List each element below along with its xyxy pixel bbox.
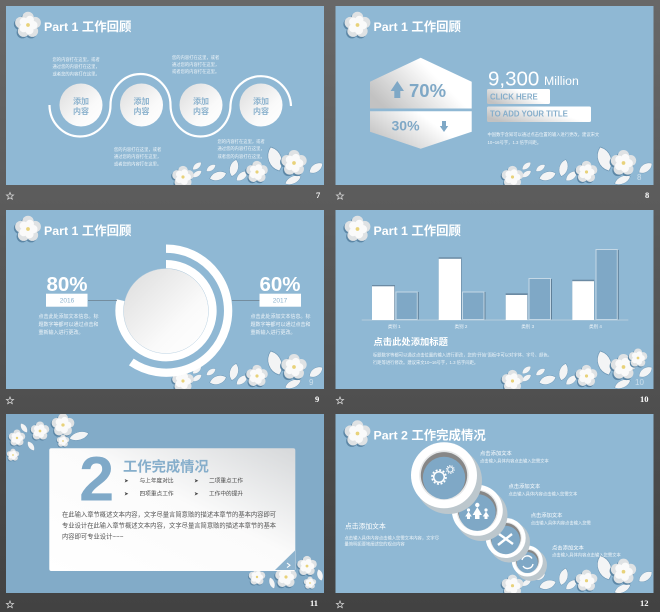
footer: slide 7: 7 <box>316 190 321 200</box>
big number <box>489 72 578 88</box>
step label 4 <box>552 544 621 558</box>
circle 2: 添加 <box>134 96 150 106</box>
text block 2: 通过您的内容打在这里， <box>172 61 219 68</box>
text block 2 <box>172 54 220 74</box>
circle 3 <box>180 84 222 126</box>
connector right <box>232 300 260 301</box>
text block 2: 您的内容打在这里，或者 <box>172 54 220 61</box>
extra flower <box>628 348 647 368</box>
right description: 点击此处添加文本信息。标 <box>250 313 311 320</box>
text block 3 <box>114 146 162 166</box>
left label <box>344 522 440 548</box>
footer: slide 11: 11 <box>310 598 318 608</box>
text block 1: 或者您的内容打在这里。 <box>52 70 100 78</box>
big number: 9,300 <box>488 68 539 90</box>
circle 1 <box>60 84 102 126</box>
icon: tools <box>498 534 513 545</box>
flower logo <box>343 420 370 447</box>
ring chart <box>119 249 228 373</box>
button: add title <box>487 106 591 122</box>
80% stat: 80% <box>46 273 88 296</box>
hexagon top: 70% <box>370 58 472 108</box>
chart description: 标题数字等都可以通过点击位置的输入进行更改，您的“开始”面板中可以对字体、字号、颜色、 <box>373 352 552 358</box>
step label 4: 点击添加文本 <box>552 544 584 552</box>
footer: slide 12 <box>336 598 648 608</box>
page number: 9 <box>309 378 314 387</box>
text block 3: 通过您的内容打在这里， <box>114 153 161 160</box>
flower logo <box>343 12 370 38</box>
button: click here <box>487 89 550 104</box>
bullet list: ➤ <box>124 478 129 484</box>
big number: Million <box>544 74 579 88</box>
step circle 4 <box>512 546 547 581</box>
chart description <box>373 352 552 366</box>
bullet list: 四项重点工作 <box>140 489 174 497</box>
circle 1: 添加 <box>73 96 89 106</box>
slide 7: wave timeline <box>6 6 325 188</box>
step label 3 <box>531 511 592 526</box>
right description <box>250 313 311 336</box>
card <box>49 448 295 571</box>
category labels: 类别 2 <box>455 323 468 330</box>
step circle 3 <box>486 518 530 562</box>
slide 9: ring chart <box>6 210 325 392</box>
icon: refresh <box>522 556 533 568</box>
wave line <box>50 74 291 136</box>
left description <box>38 313 99 336</box>
step label 1: 点击输入具体内容点击输入您需文本 <box>480 458 549 464</box>
right description: 题数字等都可以通过点击和 <box>250 321 311 328</box>
bullet list: ➤ <box>194 478 199 484</box>
category labels <box>388 324 602 329</box>
60% stat: 60% <box>259 273 301 296</box>
step label 4: 点击输入具体内容点击输入您需文本 <box>552 552 621 558</box>
circle 4: 内容 <box>253 106 269 116</box>
left label: 点击输入具体内容点击输入您需文本内容，文字尽 <box>344 534 440 542</box>
slide 8 heading: Part 1 工作回顾 <box>374 19 462 34</box>
left label: 点击添加文本 <box>345 522 386 530</box>
category labels: 类别 4 <box>589 323 602 330</box>
text block 3: 或者您的内容打在这里。 <box>114 160 161 168</box>
circle 1: 内容 <box>73 106 89 116</box>
hexagon top: 70%: 70% <box>409 80 446 101</box>
80% stat: 2016 <box>60 298 75 304</box>
slide 10 heading: Part 1 工作回顾 <box>374 223 462 238</box>
description text: 中国数字含知可以通过点击位置的输入进行更改，建议宋文 <box>488 131 600 138</box>
connector left <box>88 300 117 301</box>
page number: 8 <box>637 173 642 182</box>
description text: 10~16号字，1.3 倍字间距。 <box>488 139 541 146</box>
description text <box>488 132 599 145</box>
section number: 2 <box>79 444 114 514</box>
circle 3: 内容 <box>193 106 209 116</box>
circle 2: 内容 <box>134 106 150 116</box>
flower logo <box>14 12 41 38</box>
bottom-right flowers <box>248 556 324 590</box>
bullet list: ➤ <box>124 491 129 497</box>
footer: slide 9: 9 <box>315 394 319 404</box>
slide 9 heading: Part 1 工作回顾 <box>44 223 132 238</box>
left description: 重新输入进行更改。 <box>38 329 84 336</box>
80% stat <box>46 277 88 307</box>
flower logo <box>14 216 41 242</box>
body text: 专业设计在此输入章节概述文本内容，文字尽量言简意赅的描述本章节的基本 <box>62 520 277 530</box>
text block 1 <box>52 56 100 76</box>
step label 2: 点击输入具体内容点击输入您需文本 <box>508 490 578 498</box>
step label 1: 点击添加文本 <box>480 449 512 457</box>
footer: slide 7 <box>6 190 321 200</box>
slide 12: stepped circles <box>336 414 654 597</box>
bullet list: 与上年度对比 <box>140 476 174 484</box>
hexagon bottom: 30%: 30% <box>392 118 420 134</box>
icon: people <box>465 503 489 519</box>
text block 2: 或者您的内容打在这里。 <box>172 68 219 75</box>
footer: slide 8 <box>336 190 649 200</box>
text block 1: 通过您的内容打在这里， <box>52 63 100 70</box>
circle 4: 添加 <box>253 96 269 106</box>
button: add title: TO ADD YOUR TITLE <box>490 110 568 118</box>
footer: slide 12: 12 <box>640 598 648 608</box>
chart description: 行距等进行修改。建议宋文10~16号字，1.3 倍字间距。 <box>373 359 478 366</box>
corner fold <box>275 550 295 570</box>
text block 4: 通过您的内容打在这里， <box>218 145 265 152</box>
footer: slide 11 <box>6 598 318 608</box>
top-left flowers <box>6 413 90 461</box>
category labels: 类别 1 <box>388 323 401 330</box>
step label 3: 点击添加文本 <box>531 511 563 519</box>
slide 7 heading: Part 1 工作回顾 <box>44 19 132 34</box>
slide 8: hexagon stats <box>336 6 654 188</box>
body text <box>62 510 277 540</box>
section heading: 工作完成情况 <box>123 458 209 476</box>
step label 2 <box>508 482 578 498</box>
button: click here: CLICK HERE <box>490 92 538 102</box>
step circle 1 <box>411 442 482 514</box>
chevron <box>287 563 290 568</box>
text block 1: 您的内容打在这里，或者 <box>52 56 100 63</box>
footer: slide 8: 8 <box>645 190 649 200</box>
chart heading: 点击此处添加标题 <box>374 336 449 347</box>
category labels: 类别 3 <box>521 323 535 330</box>
footer: slide 10: 10 <box>640 394 648 404</box>
circle 4 <box>240 84 282 126</box>
60% stat: 2017 <box>273 298 288 304</box>
60% stat <box>260 277 301 307</box>
left description: 点击此处添加文本信息。标 <box>38 313 99 320</box>
text block 4 <box>218 138 265 160</box>
body text: 在此输入章节概述文本内容，文字尽量言简意赅的描述本章节的基本内容即可 <box>62 510 276 518</box>
body text: 内容即可专业设计~~~ <box>62 532 124 540</box>
right description: 重新输入进行更改。 <box>250 329 296 336</box>
slide 11: section card <box>6 413 324 593</box>
bullet list <box>124 476 243 497</box>
step circle 2 <box>452 485 508 541</box>
slide 12 heading: Part 2 工作完成情况 <box>374 428 486 442</box>
step label 2: 点击添加文本 <box>508 482 541 490</box>
icon: gears <box>432 466 454 484</box>
bullet list: 二项重点工作 <box>209 476 243 484</box>
footer: slide 10 <box>336 394 648 404</box>
page number: 10 <box>635 378 644 387</box>
slide 10: bar chart <box>336 210 654 392</box>
footer: slide 9 <box>6 394 319 404</box>
hexagon bottom: 30% <box>370 111 472 149</box>
bullet list: ➤ <box>194 491 199 497</box>
left label: 量简明扼要地阐述您的观点内容 <box>344 540 405 548</box>
left description: 题数字等都可以通过点击和 <box>38 321 99 328</box>
circle 2 <box>120 84 163 126</box>
text block 4: 您的内容打在这里，或者 <box>218 138 265 145</box>
text block 4: 或者您的内容打在这里。 <box>218 153 265 160</box>
step label 3: 点击输入具体内容点击输入您需 <box>531 520 592 526</box>
step label 1 <box>480 449 549 464</box>
bullet list: 工作中的提升 <box>209 489 243 497</box>
bar chart <box>362 250 628 320</box>
flower logo <box>343 216 370 242</box>
circle 3: 添加 <box>193 96 209 106</box>
text block 3: 您的内容打在这里，或者 <box>114 146 162 153</box>
